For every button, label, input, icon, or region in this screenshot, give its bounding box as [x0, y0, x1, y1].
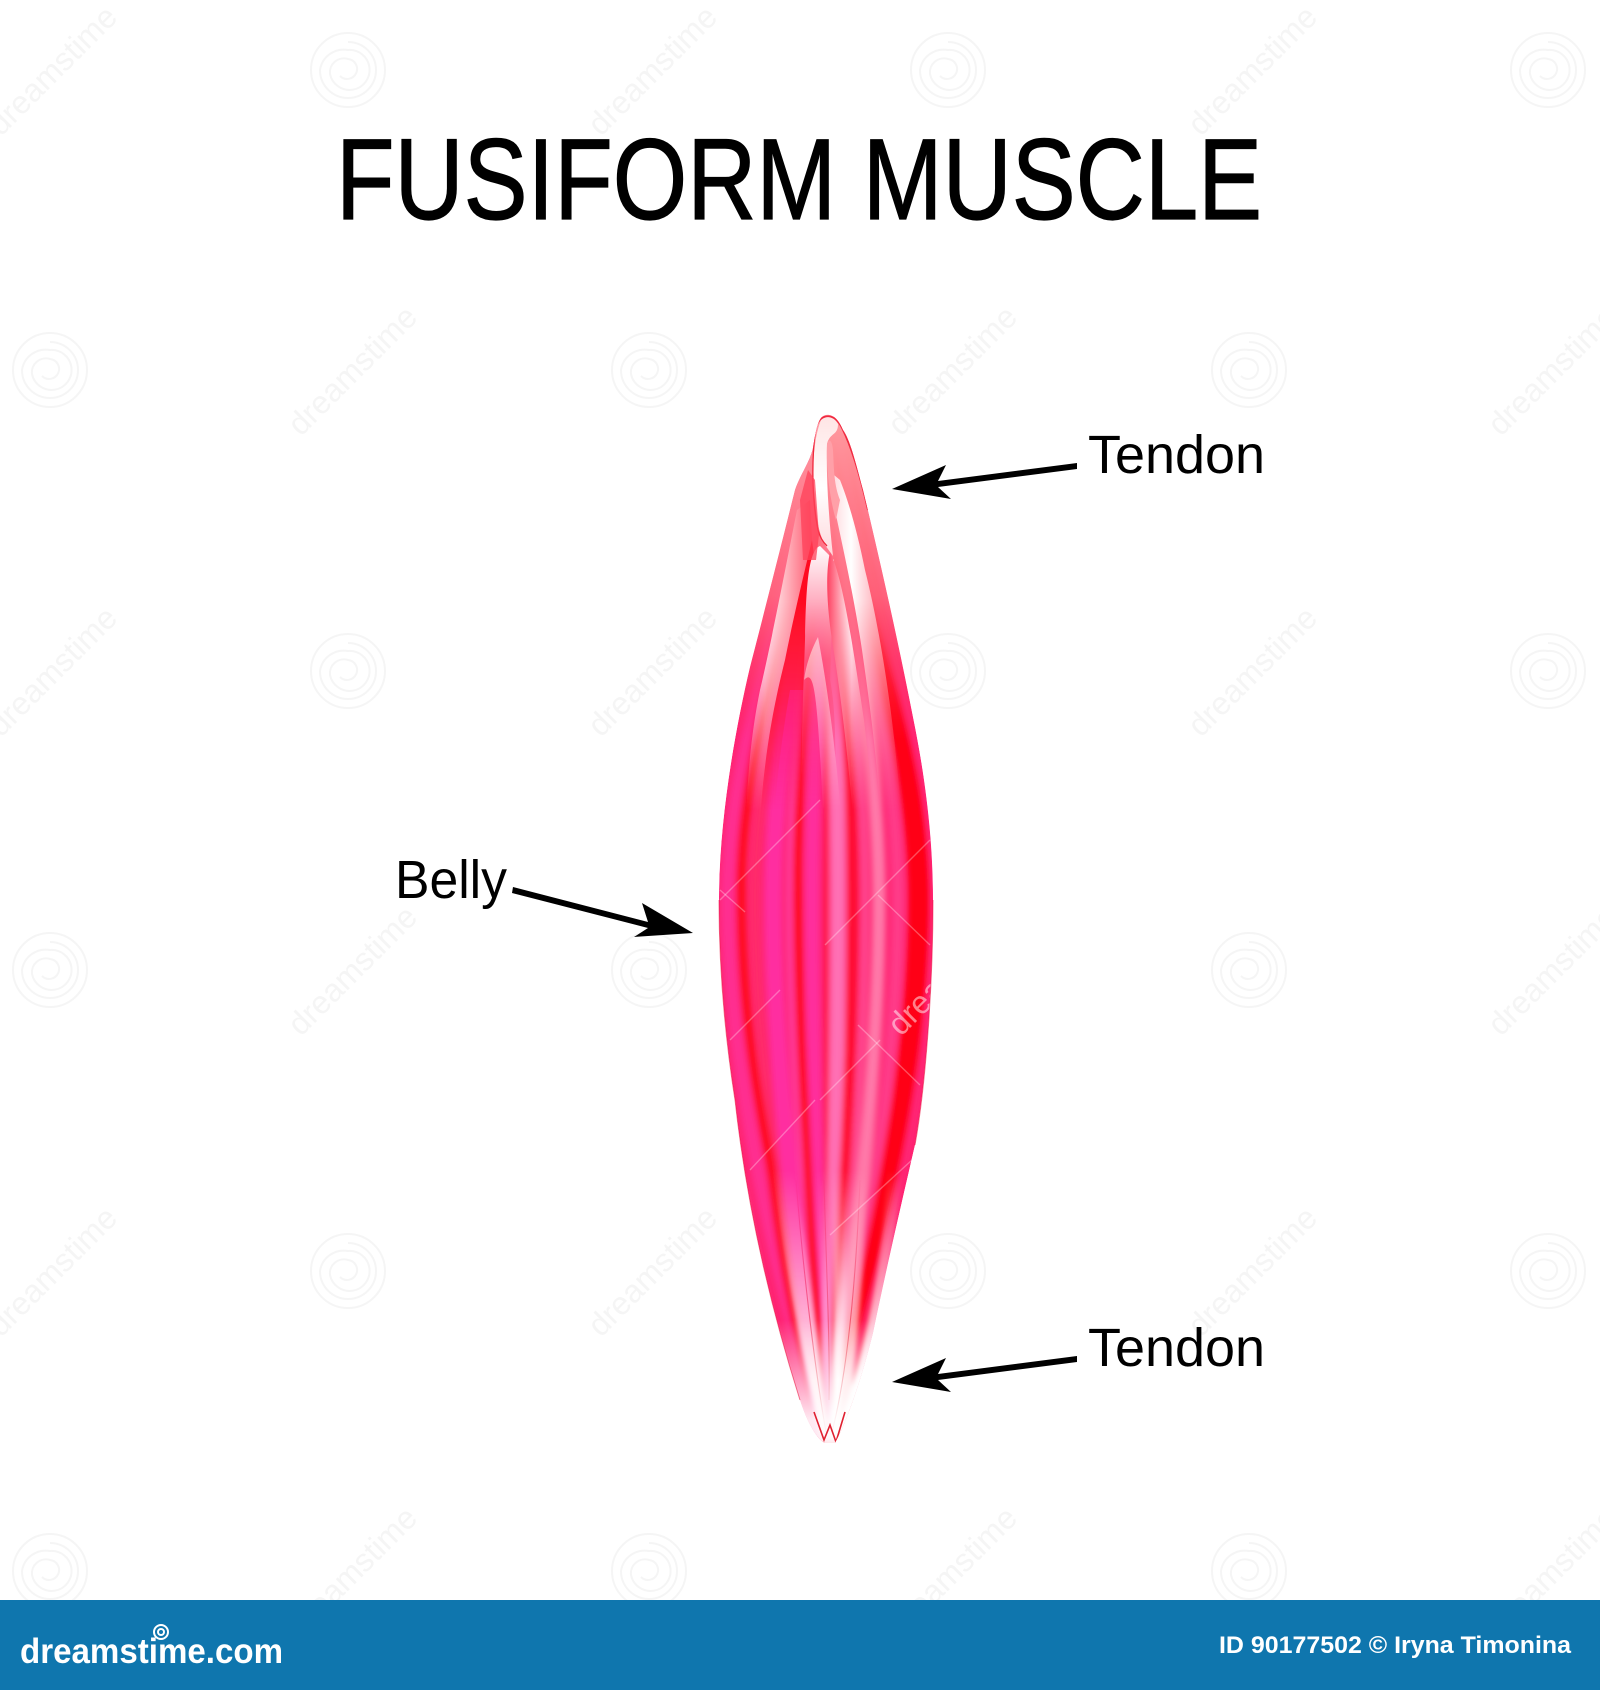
- title: FUSIFORM MUSCLE: [336, 116, 1262, 244]
- watermark pattern: dreamstime: [580, 1199, 724, 1343]
- faint watermark on muscle: dreamstime: [880, 898, 1024, 1042]
- muscle base: [719, 415, 933, 1443]
- apex tendon: [813, 416, 838, 556]
- bottom tendon highlights: [774, 1178, 900, 1441]
- faint watermark lines: [720, 800, 930, 1235]
- muscle edge: [719, 900, 933, 1400]
- watermark pattern: dreamstime: [580, 0, 724, 142]
- watermark pattern: dreamstime: [1180, 0, 1324, 142]
- watermark pattern: dreamstime: [880, 1499, 1024, 1643]
- tendon top cap: [739, 414, 913, 724]
- label: belly: Belly: [395, 850, 507, 910]
- muscle illustration: [718, 414, 934, 1443]
- watermark pattern: dreamstime: [580, 599, 724, 743]
- watermark pattern: dreamstime: [880, 298, 1024, 442]
- arrow: bottom tendon: [892, 1356, 1077, 1392]
- footer logo: dreamstime.com: [20, 1632, 283, 1671]
- muscle fibre shading: [728, 430, 933, 1440]
- tendon tip lines: [814, 1412, 845, 1442]
- watermark pattern: dreamstime: [280, 1499, 424, 1643]
- footer bar: [0, 1600, 1600, 1690]
- watermark pattern: dreamstime: [1180, 1199, 1324, 1343]
- label: top tendon: Tendon: [1088, 425, 1265, 485]
- label: bottom tendon: Tendon: [1088, 1318, 1265, 1378]
- top tendon highlights: [747, 476, 898, 802]
- image credit: ID 90177502 © Iryna Timonina: [1219, 1632, 1572, 1659]
- watermark pattern: dreamstime: [1180, 599, 1324, 743]
- arrow: belly: [512, 887, 693, 937]
- watermark pattern: dreamstime: [280, 898, 424, 1042]
- thin fibre lines: [796, 1180, 860, 1432]
- watermark pattern: dreamstime: [280, 298, 424, 442]
- arrow: top tendon: [892, 463, 1077, 499]
